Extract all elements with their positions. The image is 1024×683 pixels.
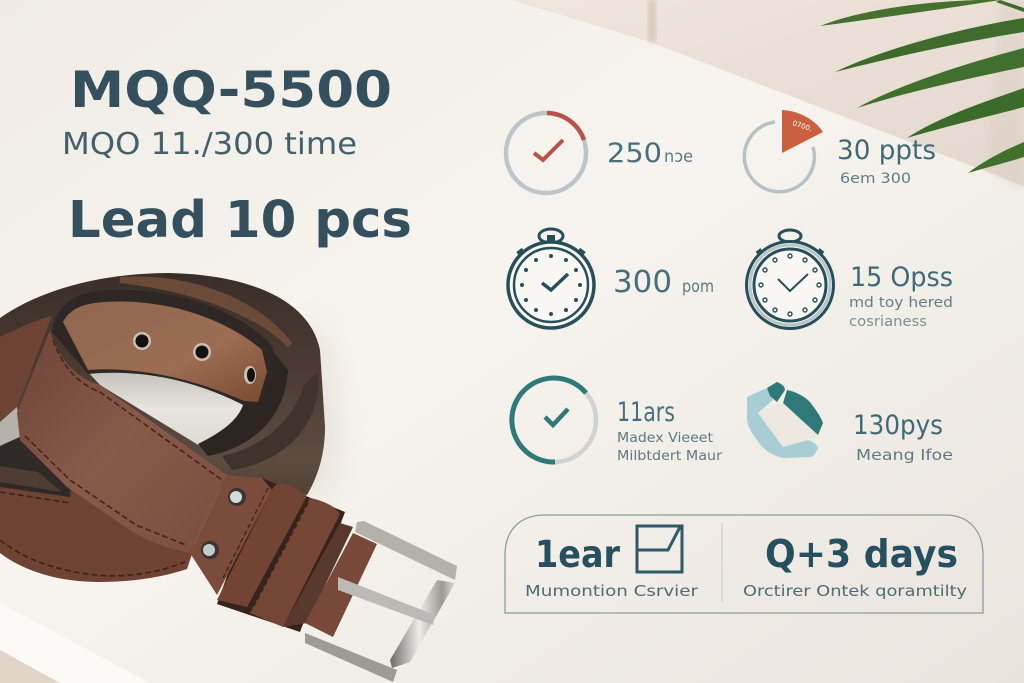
icon: teal ring with check (512, 378, 596, 462)
keeper underlay (217, 478, 345, 632)
unit: nɔe (664, 147, 693, 167)
caption line one: Madex Vieeet (617, 431, 713, 446)
caption line two: cosrianess (849, 314, 927, 330)
strap tab with rivets (190, 475, 272, 595)
value: 130pys (853, 410, 943, 441)
stat: ring 250 (506, 113, 693, 193)
caption: Meang Ifoe (856, 446, 953, 464)
coil right bands (198, 345, 288, 456)
icon: square (637, 526, 682, 572)
stat: band 130pys (747, 382, 953, 464)
heading: lead: Lead 10 pcs (68, 191, 412, 250)
back coil (0, 273, 325, 505)
title: MQQ-5500: MQQ-5500 (70, 61, 392, 119)
stat: stopwatch 300 (508, 229, 714, 328)
icon: wrist band (747, 382, 823, 458)
value: 250 (607, 138, 662, 169)
value: 15 Opss (850, 262, 953, 293)
panel outline (505, 515, 983, 613)
hollow centre (88, 371, 245, 446)
value: 11ars (617, 397, 675, 428)
icon: stopwatch (508, 229, 594, 328)
keeper one (217, 484, 307, 607)
belt shadow (260, 320, 340, 500)
inner leather with holes (52, 290, 274, 405)
value: 30 ppts (837, 135, 936, 166)
divider (721, 523, 723, 602)
value: Q+3 days: Q+3 days (765, 532, 958, 576)
caption: right: Orctirer Ontek qoramtilty (743, 582, 967, 600)
dark coil edges (0, 436, 70, 500)
belt holes (133, 332, 256, 384)
caption line two: Milbtdert Maur (617, 449, 723, 464)
keeper two (250, 498, 340, 627)
plant leaves (820, 0, 1024, 173)
icon: stopwatch outline (746, 230, 834, 328)
strap near buckle (305, 533, 377, 637)
buckle (305, 521, 457, 682)
value: 1ear: 1ear (535, 533, 621, 576)
bottom summary panel (505, 515, 983, 613)
caption: left: Mumontion Csrvier (525, 582, 699, 600)
leather belt illustration (0, 273, 457, 682)
caption line one: md toy hered (849, 295, 953, 311)
left coil leather (0, 316, 52, 422)
stat: stopwatch 15 Opss (746, 230, 953, 330)
lower left strap (0, 480, 195, 582)
icon: ring with wedge (744, 110, 823, 192)
strap under keeper (283, 523, 353, 627)
unit: pom (682, 277, 714, 297)
hollow left sliver (0, 407, 22, 446)
stat: pie 30 ppts (744, 110, 936, 192)
icon: progress ring with check (506, 113, 586, 193)
icon: ring with wedge: 0700. (791, 119, 813, 133)
subtitle: MQO 11./300 time (62, 127, 357, 162)
caption: 6em 300 (840, 171, 911, 187)
main strap (17, 330, 227, 553)
value: 300 (613, 265, 672, 300)
top coil brown strip (120, 280, 290, 345)
stat: ring 11ars (512, 378, 723, 464)
